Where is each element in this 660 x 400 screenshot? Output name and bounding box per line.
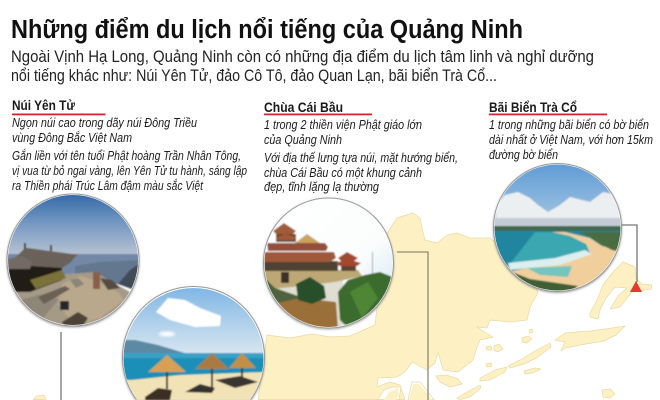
heading: Chua Cai Bau: Chùa Cái Bầu [264, 100, 343, 115]
description: của Quảng Ninh [264, 133, 342, 147]
panel: Nui Yen Tu [12, 98, 247, 193]
description: Với địa thế lưng tựa núi, mặt hướng biển, [264, 151, 458, 165]
map: Quang Ninh [33, 213, 652, 400]
map: island [436, 375, 462, 387]
map: islet [529, 329, 533, 333]
map: island [457, 385, 481, 400]
photo: Cai Bau pagoda [263, 198, 395, 330]
heading: Nui Yen Tu: Núi Yên Tử [12, 98, 75, 113]
map: island [602, 389, 615, 398]
title: Những điểm du lịch nổi tiếng của Quảng Ninh [11, 16, 523, 44]
description: Gắn liền với tên tuổi Phật hoàng Trần Nhân Tông, [12, 148, 241, 163]
description: đường bờ biển [489, 148, 558, 162]
description: vùng Đông Bắc Việt Nam [12, 130, 132, 145]
photo: Tra Co beach [493, 163, 623, 300]
underline [489, 114, 607, 115]
connector: Chua Cai Bau [397, 252, 428, 400]
map: island [480, 367, 507, 381]
description: 1 trong 2 thiền viện Phật giáo lớn [264, 118, 422, 132]
description: Ngọn núi cao trong dãy núi Đông Triều [12, 116, 197, 130]
map: islet [494, 344, 503, 352]
map: southern inlet [378, 382, 434, 400]
underline [264, 114, 372, 115]
underline [12, 114, 106, 115]
description [12, 116, 247, 193]
photo: Yen Tu mountain temple [5, 190, 141, 335]
description: đẹp, tĩnh lặng lạ thường [264, 180, 379, 194]
description: vị vua từ bỏ ngai vàng, lên Yên Tử tu hành, sáng lập [12, 164, 247, 178]
intro text: Ngoài Vịnh Hạ Long, Quảng Ninh còn có những địa điểm du lịch tâm linh và nghỉ dưỡng [11, 47, 594, 66]
map: large island [555, 326, 625, 351]
description [264, 118, 458, 194]
map: mainland [258, 213, 538, 400]
map: islet [33, 395, 46, 400]
map: island [524, 368, 541, 374]
connector: Nui Yen Tu [60, 332, 62, 400]
description: chùa Cái Bầu có một khung cảnh [264, 166, 422, 180]
intro text: nổi tiếng khác như: Núi Yên Tử, đảo Cô Tô, đảo Quan Lạn, bãi biển Trà Cổ... [11, 66, 497, 85]
map: islet [486, 346, 492, 350]
panel: Chua Cai Bau [264, 100, 458, 194]
intro text [11, 47, 594, 85]
description [489, 118, 653, 162]
connector: Bai Bien Tra Co [620, 225, 637, 282]
panel: Bai Bien Tra Co [489, 100, 653, 162]
map: islet [522, 336, 532, 343]
heading: Bai Bien Tra Co: Bãi Biển Trà Cổ [489, 100, 577, 115]
map: long island chain [508, 343, 551, 368]
marker: red triangle [630, 281, 642, 292]
photo: beach with thatched umbrellas [122, 286, 266, 400]
map: northeast peninsula [590, 262, 652, 319]
map: southern island [384, 384, 432, 400]
description: ra Thiền phái Trúc Lâm đậm màu sắc Việt [12, 178, 203, 193]
map: islet [486, 363, 492, 367]
